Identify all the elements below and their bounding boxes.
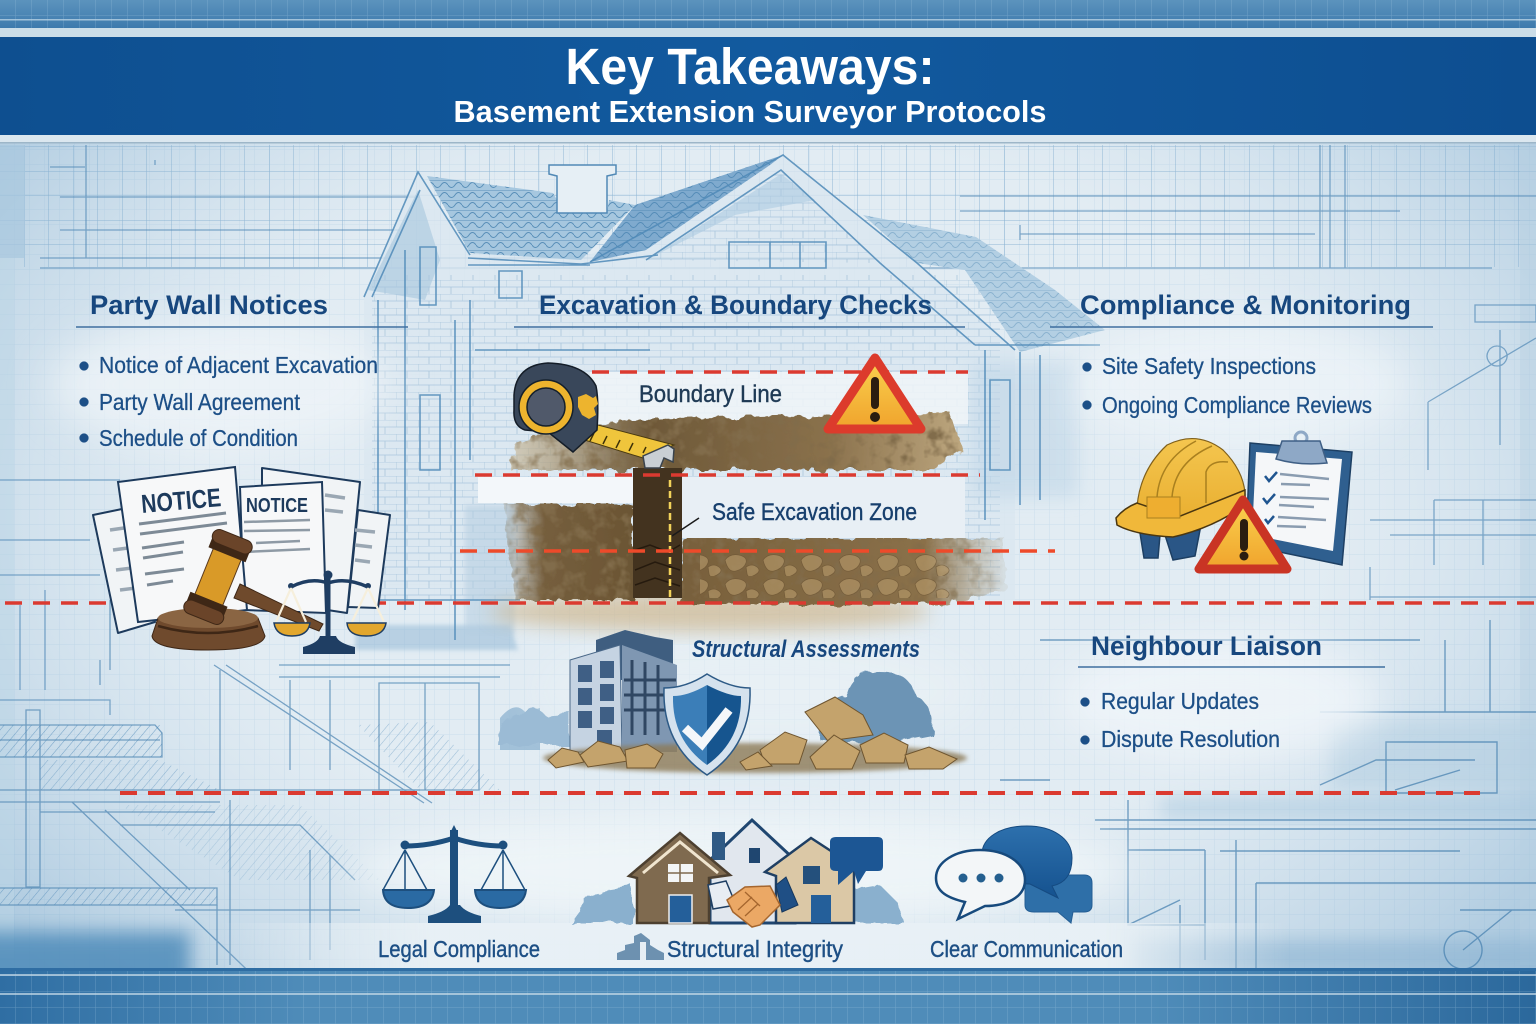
top band [0,0,1536,28]
corner blue fade [0,932,190,992]
notice sheet left: NOTICE [140,482,222,519]
back papers [93,468,390,633]
left roof shingles [427,176,635,260]
notice sheet right [240,482,326,613]
tape blade [575,425,674,458]
title text: Key Takeaways: [566,38,934,95]
right house [765,838,854,923]
gable face shade [368,190,440,300]
house blueprint illustration [364,155,1105,640]
small scales [274,570,386,654]
house outlines [364,155,1100,640]
front gable tint [650,174,815,258]
chimney [549,165,616,213]
right bush [820,671,932,745]
bullet list: compliance: Site Safety Inspections [1102,353,1316,379]
column heading: compliance and monitoring: Compliance & Monitoring [1080,290,1411,320]
icon: speech bubbles [936,826,1092,923]
plan strokes [0,600,1130,987]
brown house [629,833,730,923]
column heading: excavation and boundary checks: Excavation & Boundary Checks [539,290,932,320]
middle house [710,820,795,923]
heading: party wall notices: Party Wall Notices [90,290,328,320]
bullet list: Party Wall Agreement [99,389,301,415]
notice sheet right: NOTICE [246,495,308,517]
side roof texture [863,215,1105,352]
hatch shade below [120,805,380,880]
handshake [708,877,798,927]
column: Party Wall Notices [76,290,408,451]
icon: structural assessments scene [498,630,967,775]
goggles [1140,530,1200,560]
blueprint plan lines: upper background [0,145,1536,715]
bullet list: neighbour liaison: Regular Updates [1101,688,1259,714]
icon: hard hat, clipboard and warning [1116,432,1352,569]
label: structural assessments: Structural Assessments [692,636,920,663]
bullet list: neighbour liaison [1080,688,1280,752]
red dashed boundary lines [5,372,1536,793]
gavel block [152,608,265,650]
hard hat [1116,439,1245,537]
tape hook [643,445,674,468]
left white band [478,477,633,503]
brick texture [372,170,1000,600]
left bush [498,709,570,745]
lower soil right [682,538,1005,604]
icon: neighbouring houses and handshake [570,820,905,927]
main roof right [590,155,783,262]
icon: notices, gavel and scales [93,467,390,654]
shaded bush left [500,707,540,750]
label: safe excavation zone: Safe Excavation Zone [712,499,917,526]
plan strokes [1000,620,1536,1000]
shaded strip [1160,797,1536,819]
warning triangle [1199,500,1287,569]
label: clear communication: Clear Communication [930,936,1123,962]
rubble [543,697,967,773]
gavel handle [234,584,323,631]
icon: tape measure [514,363,674,468]
hatched band [0,725,162,757]
bushes [570,885,905,923]
bottom ledge [0,888,217,905]
white wash behind boundary [590,372,968,424]
house wall block [364,155,1015,600]
bullet list [80,352,378,451]
yellow dashed measure [669,480,671,598]
stair shading [355,625,518,650]
title banner [0,28,1536,144]
cobble stones [700,552,950,598]
tape body [514,363,598,452]
label: boundary line: Boundary Line [639,381,782,408]
bullet list: Notice of Adjacent Excavation [99,352,378,378]
building [570,630,677,752]
shield with check [664,674,750,775]
label: legal compliance: Legal Compliance [378,936,540,962]
roof hatch [358,722,500,790]
blueprint plan lines: lower left [0,600,1130,992]
bullet list: neighbour liaison: Dispute Resolution [1101,726,1280,752]
side roof [863,215,1105,352]
trench lower texture [635,545,680,586]
bullet list: Schedule of Condition [99,425,298,451]
shaded block [1330,720,1536,790]
gavel head [182,527,254,627]
safe zone label band [682,477,965,538]
upper soil layer [510,412,962,470]
label: structural integrity with icon: Structural Integrity [667,936,843,962]
lower left wall shade [465,505,515,635]
central soil section [478,372,1005,632]
bullet list: compliance: Ongoing Compliance Reviews [1102,392,1372,418]
footer band [0,923,1536,1024]
lower soil left [505,505,633,600]
panel backgrounds: soft white washes [50,320,1410,925]
leader line [672,518,699,536]
house right wing [972,362,1078,498]
blueprint plan lines: lower right [1000,620,1536,1000]
column heading: neighbour liaison: Neighbour Liaison [1091,631,1322,661]
hatched band lower [40,760,220,790]
subtitle text: Basement Extension Surveyor Protocols [454,94,1046,129]
notice sheet left [118,467,247,622]
soil fade below [490,592,930,632]
icon: warning triangle [828,358,921,429]
right roof texture [590,155,783,262]
left roof [427,176,635,260]
right fade [1130,940,1536,974]
clipboard [1246,432,1352,565]
label: structural integrity with icon [617,933,843,962]
excavation trench [633,468,682,598]
speech bubble [830,837,883,885]
icon: legal compliance scales [383,825,526,923]
bullet list: compliance [1082,353,1372,418]
